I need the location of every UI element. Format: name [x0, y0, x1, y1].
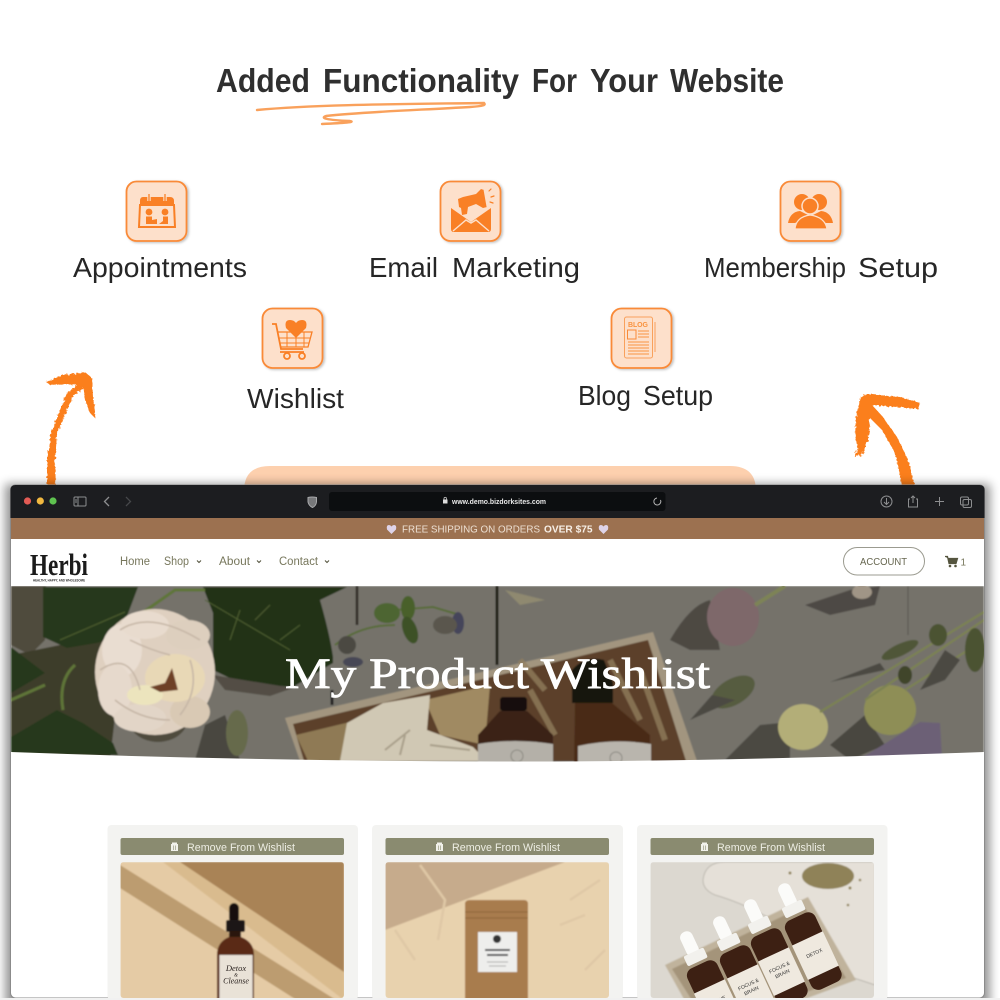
- remove button: Remove From Wishlist: [187, 842, 295, 854]
- remove button: Remove From Wishlist: [452, 842, 560, 854]
- title underline scribble: [257, 103, 485, 124]
- promo banner: FREE SHIPPING ON ORDERS: [402, 524, 540, 536]
- feature: appointments: [73, 182, 247, 283]
- product card 3: [637, 825, 888, 1000]
- title: Website: [670, 62, 784, 99]
- title: Added: [216, 62, 310, 99]
- address bar: [329, 492, 666, 511]
- remove button: [120, 838, 344, 855]
- address bar: www.demo.bizdorksites.com: [451, 497, 546, 506]
- bottle label text: Cleanse: [223, 976, 249, 986]
- hero banner: [11, 585, 985, 766]
- hero photograph: [11, 585, 985, 766]
- window controls: [24, 497, 57, 505]
- bottle 3: FOCUS &: [768, 960, 792, 975]
- browser window: [5, 484, 990, 1000]
- label: Email: [369, 252, 438, 283]
- browser toolbar: [10, 485, 984, 518]
- label: Wishlist: [247, 383, 344, 414]
- logo: HEALTHY, HAPPY, AND WHOLESOME: [33, 578, 85, 582]
- arrow: right, pointing up: [854, 394, 920, 490]
- site navigation: [30, 547, 966, 582]
- bottle 1: [680, 931, 734, 998]
- bottle label text: Detox: [226, 963, 246, 973]
- account button: [844, 548, 924, 575]
- label: Membership: [704, 252, 846, 283]
- logo: Herbi: [30, 547, 88, 582]
- icon: group of members: [780, 182, 840, 241]
- window shadow: [5, 484, 990, 1000]
- bottle label text: &: [234, 974, 238, 978]
- product photo: four dropper bottles in a box: [650, 862, 875, 1000]
- nav links: [120, 556, 329, 568]
- feature: blog setup: [578, 308, 713, 411]
- account button: ACCOUNT: [860, 556, 908, 568]
- title: [216, 62, 784, 99]
- gift box with straw: [285, 632, 697, 761]
- remove button: [386, 838, 609, 855]
- peony flower: [95, 609, 215, 735]
- cart icon and count: [945, 556, 966, 568]
- feature: wishlist: [247, 308, 344, 414]
- nav links: Contact: [279, 556, 319, 568]
- right side flowers and lavender: [670, 585, 985, 760]
- remove button: Remove From Wishlist: [717, 842, 825, 854]
- sidebar and back/forward icons: [74, 497, 130, 506]
- label: Setup: [858, 252, 938, 283]
- bottle 3: BRAIN: [774, 968, 791, 980]
- toolbar action icons: [881, 496, 972, 508]
- shield icon: [308, 497, 316, 508]
- nav links: About: [219, 556, 251, 568]
- bottle 4: [778, 883, 842, 990]
- title: For: [532, 62, 577, 99]
- label: [704, 252, 938, 283]
- label: Appointments: [73, 252, 247, 283]
- bottle 2: BRAIN: [743, 985, 760, 997]
- nav links: Shop: [164, 556, 189, 568]
- peach tab behind browser: [244, 466, 756, 491]
- amber bottles: [478, 659, 651, 766]
- remove button: [650, 838, 874, 855]
- product photo: dropper bottle: [120, 862, 345, 1000]
- icon: cart with heart: [262, 308, 322, 368]
- promo banner: [11, 518, 984, 539]
- arrow: left, pointing up: [46, 372, 96, 490]
- cart icon and count: 1: [960, 558, 966, 568]
- label: Marketing: [452, 252, 580, 283]
- promo banner: OVER $75: [544, 524, 593, 536]
- icon: envelope with megaphone: [440, 182, 500, 241]
- feature: membership setup: [704, 182, 938, 283]
- label: [369, 252, 580, 283]
- bottle 2: FOCUS &: [737, 977, 761, 992]
- bottle 3: [744, 899, 808, 998]
- feature: email marketing: [369, 182, 580, 283]
- small herbs and leaves: [195, 715, 240, 760]
- product photo: kraft pouch: [385, 862, 610, 1000]
- title: Functionality: [323, 62, 520, 99]
- label: Blog: [578, 380, 631, 411]
- bottle 4: DETOX: [806, 947, 824, 960]
- icon: blog newspaper: BLOG: [628, 322, 649, 329]
- title: Your: [590, 62, 658, 99]
- nav links: Home: [120, 556, 150, 568]
- linen pouch: [340, 695, 487, 761]
- product card 1: [108, 825, 358, 1000]
- bottle 2: [713, 916, 774, 998]
- label: Setup: [643, 380, 713, 411]
- icon: calendar with people: [126, 182, 186, 241]
- product card 2: [372, 825, 623, 1000]
- window body: [10, 485, 984, 998]
- label: [578, 380, 713, 411]
- hero heading: My Product Wishlist: [285, 651, 710, 698]
- bottom page edge: [0, 998, 1000, 1000]
